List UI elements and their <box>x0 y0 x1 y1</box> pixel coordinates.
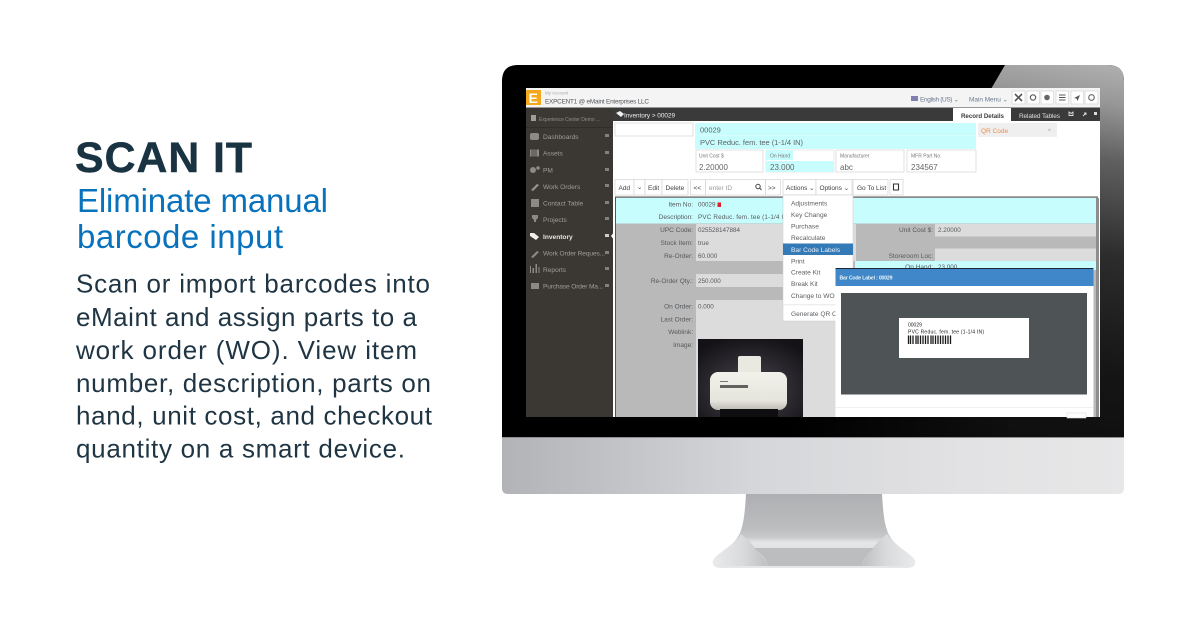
QR code selector: ^ <box>1048 129 1051 135</box>
form labels and values <box>651 202 961 349</box>
nav: work orders <box>531 184 609 191</box>
form labels and values: 23.000 <box>938 264 958 271</box>
nav: purchase orders: Purchase Order Ma... <box>543 284 603 290</box>
bar code label dialog: Bar Code Label : 00029 <box>840 276 893 282</box>
nav: PM <box>530 166 609 174</box>
on hand field: On Hand <box>770 154 790 160</box>
manufacturer field: Manufacturer <box>840 154 870 160</box>
form labels and values: UPC Code: <box>660 227 693 234</box>
record header <box>615 123 1057 172</box>
content background <box>613 121 1100 417</box>
nav: projects: Projects <box>543 217 568 224</box>
printed barcode label: PVC Reduc. fem. tee (1-1/4 IN) <box>908 330 984 336</box>
icon: app logo <box>526 90 541 106</box>
on hand field: 23.000 <box>770 163 795 172</box>
form labels and values: true <box>698 240 709 247</box>
active tab <box>953 108 1011 121</box>
text column <box>75 134 433 464</box>
nav: assets: Assets <box>543 150 563 158</box>
action toolbar: Options ⌄ <box>820 185 849 192</box>
unit cost field <box>696 150 763 172</box>
nav: inventory <box>530 233 613 241</box>
actions dropdown menu: Key Change <box>791 212 828 219</box>
nav: work orders: Work Orders <box>543 184 581 191</box>
nav: work order requests: Work Order Reques... <box>543 250 605 258</box>
form labels and values: 00029 <box>698 202 716 208</box>
form labels and values: Storeroom Loc: <box>889 253 933 260</box>
form labels and values: 0.000 <box>698 304 714 310</box>
bar code label dialog <box>836 268 1094 418</box>
actions dropdown menu: Print <box>791 258 805 266</box>
app top bar <box>526 88 1100 108</box>
language and menu: Main Menu ⌄ <box>969 96 1008 104</box>
account name: My Account <box>545 90 569 96</box>
nav: projects <box>532 215 609 224</box>
part number field: MFR Part No. <box>911 154 942 160</box>
nav: dashboards <box>530 133 609 141</box>
form labels and values: Unit Cost $: <box>899 227 933 234</box>
monitor bezel <box>502 65 1124 437</box>
monitor stand <box>713 494 915 568</box>
description text: number, description, parts on <box>76 368 431 398</box>
barcode <box>908 336 950 344</box>
description text <box>75 268 433 464</box>
form labels and values: Image: <box>673 342 693 349</box>
actions dropdown menu <box>783 195 853 321</box>
form values column <box>696 224 1096 417</box>
dark tab bar <box>613 108 1100 121</box>
form labels and values: Last Order: <box>660 316 693 324</box>
monitor chin <box>502 437 1124 494</box>
unit cost field: Unit Cost $ <box>699 154 724 160</box>
title: SCAN IT <box>75 134 252 182</box>
dark tab bar: Record Details <box>961 113 1005 120</box>
form labels and values: PVC Reduc. fem. tee (1-1/4 IN <box>698 214 788 221</box>
actions dropdown menu: Purchase <box>791 224 819 230</box>
nav: PM: PM <box>543 168 553 174</box>
user row: Experience Center Demo ... <box>539 117 600 123</box>
language and menu <box>911 96 1008 104</box>
action toolbar: >> <box>768 185 776 192</box>
record header: PVC Reduc. fem. tee (1-1/4 IN) <box>700 138 804 147</box>
actions dropdown menu: Generate QR Co <box>791 311 841 318</box>
toolbar buttons <box>1012 91 1098 104</box>
action toolbar: << <box>694 185 701 192</box>
printed barcode label: 00029 <box>908 322 922 328</box>
action toolbar: Delete <box>666 185 685 192</box>
nav: assets <box>530 150 609 158</box>
form labels and values: 60.000 <box>698 253 718 260</box>
part number field <box>907 150 976 172</box>
record header: 00029 <box>700 126 721 134</box>
account name: EXPCENT1 @ eMaint Enterprises LLC <box>545 98 649 106</box>
action toolbar: Actions ⌄ <box>786 185 815 192</box>
manufacturer field <box>836 150 904 172</box>
form labels and values: 250.000 <box>698 278 721 285</box>
subtitle: barcode input <box>77 218 283 255</box>
printed barcode label <box>899 318 1029 358</box>
form labels and values: Item No: <box>668 202 693 208</box>
description text: eMaint and assign parts to a <box>76 302 418 332</box>
subtitle: Eliminate manual <box>77 182 328 219</box>
form labels and values: Description: <box>659 214 693 221</box>
language and menu: English (US) ⌄ <box>920 96 959 104</box>
account name <box>545 90 649 106</box>
description text: hand, unit cost, and checkout <box>76 400 433 430</box>
form labels and values: Re-Order: <box>664 253 693 260</box>
manufacturer field: abc <box>840 163 853 172</box>
description text: quantity on a smart device. <box>76 434 405 464</box>
form labels and values: Stock Item: <box>660 240 693 247</box>
application screenshot <box>526 88 1100 418</box>
description text: work order (WO). View item <box>75 335 417 365</box>
QR code selector <box>978 123 1057 137</box>
form labels and values: 2.20000 <box>938 227 961 234</box>
icon: app logo: E <box>528 90 538 106</box>
subtitle <box>77 182 328 255</box>
form labels and values: On Order: <box>664 304 693 310</box>
monitor illustration <box>502 65 1124 568</box>
on hand field <box>766 150 834 172</box>
form labels and values: 025528147884 <box>698 227 741 234</box>
nav: inventory: Inventory <box>543 234 573 241</box>
actions dropdown menu: Break Kit <box>791 281 818 288</box>
form labels and values: Re-Order Qty.: <box>651 278 693 285</box>
bezel glare <box>788 65 1124 437</box>
bezel glare fade <box>785 400 1015 437</box>
dark tab bar: Inventory > 00029 <box>624 112 675 120</box>
nav: reports <box>530 264 609 274</box>
nav: contact table <box>531 199 609 208</box>
action toolbar: Go To List <box>857 185 886 192</box>
action toolbar: ⌄ <box>637 184 642 191</box>
actions dropdown menu: Recalculate <box>791 235 826 242</box>
dark tab bar: Related Tables <box>1019 113 1061 120</box>
description text: Scan or import barcodes into <box>76 268 430 298</box>
nav: reports: Reports <box>543 267 567 274</box>
action toolbar: Edit <box>648 185 659 192</box>
record form <box>615 196 1099 417</box>
form labels and values: On Hand: <box>905 264 933 271</box>
part number field: 234567 <box>911 163 938 172</box>
QR code selector: QR Code <box>981 128 1008 135</box>
form labels and values: Weblink: <box>668 329 693 336</box>
actions dropdown menu: Bar Code Labels <box>791 247 841 254</box>
actions dropdown menu: Change to WO <box>791 293 835 300</box>
sidebar <box>526 108 613 417</box>
action toolbar <box>615 180 903 195</box>
item photo <box>698 339 803 417</box>
nav: dashboards: Dashboards <box>543 134 579 141</box>
actions dropdown menu: Create Kit <box>791 270 820 276</box>
unit cost field: 2.20000 <box>699 163 728 172</box>
nav: contact table: Contact Table <box>543 200 584 208</box>
user row <box>531 115 600 123</box>
actions dropdown menu: Adjustments <box>791 200 828 208</box>
action toolbar: Add <box>618 185 630 192</box>
chin edge line <box>502 437 1124 438</box>
action toolbar: enter ID <box>709 185 732 192</box>
